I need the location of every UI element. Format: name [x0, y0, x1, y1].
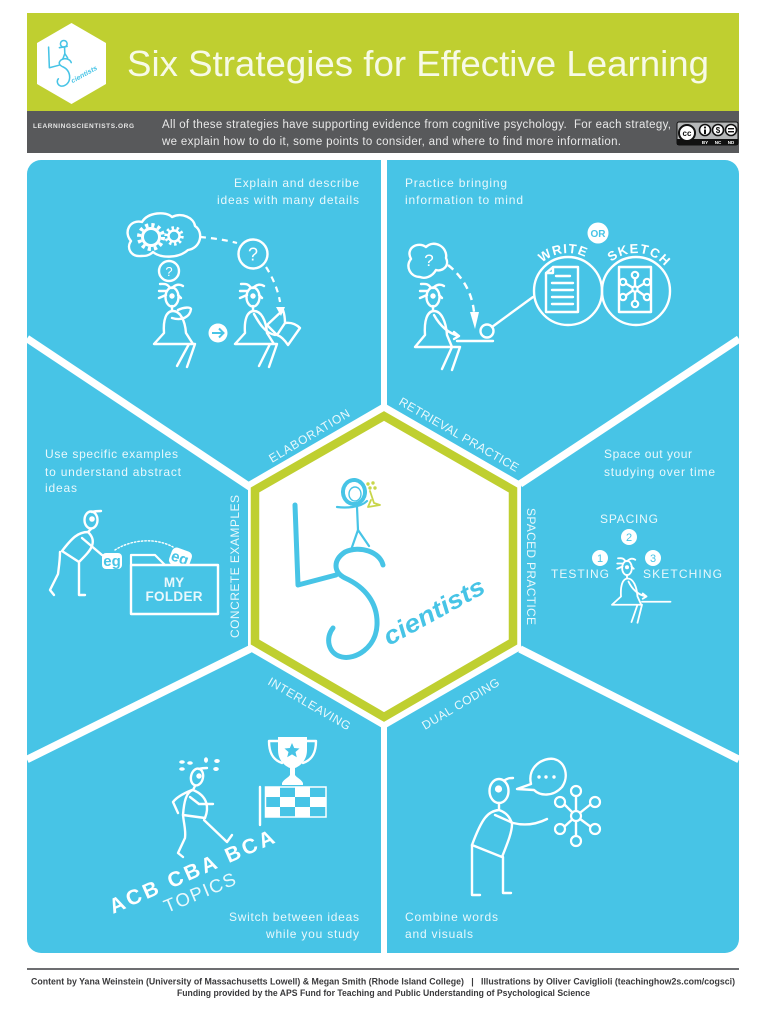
spaced practice text — [604, 447, 715, 479]
icon: rotated topics text: ACB CBA BCA — [106, 826, 278, 919]
arc text: write or sketch: OR — [590, 229, 606, 240]
creative commons badge — [677, 122, 738, 145]
icon: node network — [555, 786, 600, 846]
panel: concrete examples — [45, 447, 218, 614]
icon: my folder: FOLDER — [146, 589, 203, 604]
central hexagon logo — [248, 403, 521, 729]
panel: retrieval practice — [405, 176, 672, 372]
creative commons badge: ND — [728, 140, 735, 145]
label: retrieval practice: RETRIEVAL PRACTICE — [396, 394, 521, 475]
spacing label and numbered steps: 1 — [597, 553, 603, 565]
icon: dashed arrow — [448, 265, 479, 329]
retrieval text: information to mind — [405, 193, 523, 207]
label: spaced practice: SPACED PRACTICE — [524, 508, 538, 625]
icon: second example card: eg — [169, 547, 191, 569]
icon: seated person — [612, 558, 670, 623]
interleaving text — [229, 910, 359, 941]
icon: connector and circle — [480, 297, 533, 338]
icon: question thought cloud: ? — [424, 251, 434, 270]
icon: person at desk — [415, 284, 493, 370]
arc text: write or sketch: WRITE — [537, 244, 588, 262]
label: dual coding: DUAL CODING — [419, 675, 502, 733]
intro text: we explain how to do it, some points to consider, and where to find more information. — [161, 136, 621, 148]
icon: thinking person — [154, 284, 195, 367]
concrete examples text: Use specific examples — [45, 447, 178, 461]
header logo hexagon — [37, 23, 106, 104]
icon: leaning person — [50, 511, 102, 595]
label: concrete examples: CONCRETE EXAMPLES — [228, 495, 242, 638]
interleaving text: Switch between ideas — [229, 910, 359, 924]
icon: my folder: MY — [164, 575, 184, 590]
spacing label and numbered steps: 2 — [626, 532, 632, 544]
grey intro bar — [27, 111, 739, 153]
header banner — [27, 13, 739, 111]
intro text — [161, 119, 671, 148]
icon: standing person — [472, 778, 547, 895]
interleaving text: while you study — [265, 927, 359, 941]
icon: sketch circle — [602, 257, 670, 325]
spacing label and numbered steps: SKETCHING — [643, 567, 722, 581]
creative commons badge: NC — [715, 140, 722, 145]
icon: checkered flag — [260, 787, 326, 825]
icon: small question circle — [159, 261, 179, 281]
icon: arrow circle — [208, 324, 228, 342]
icon: write circle — [534, 257, 602, 325]
icon: dashed path with question — [200, 237, 285, 316]
creative commons badge: cc — [683, 129, 692, 138]
logo word: cientists — [378, 572, 490, 651]
spacing label and numbered steps: 3 — [650, 553, 656, 565]
dual coding text: and visuals — [405, 927, 473, 941]
arc text: write or sketch: SKETCH — [608, 244, 670, 266]
website: LEARNINGSCIENTISTS.ORG — [33, 123, 134, 130]
creative commons badge: BY — [702, 140, 708, 145]
icon: reading person — [235, 284, 277, 367]
header logo hexagon: cientists — [70, 65, 99, 85]
logo stick figure — [337, 480, 369, 550]
retrieval text: Practice bringing — [405, 176, 507, 190]
elaboration text: Explain and describe — [234, 176, 359, 190]
spacing label and numbered steps: SPACING — [600, 512, 658, 526]
blue panel background — [27, 160, 739, 953]
icon: trophy — [269, 737, 316, 785]
footer credits: Funding provided by the APS Fund for Teaching and Public Understanding of Psychological Science — [177, 988, 590, 998]
icon: speech bubble — [517, 759, 566, 795]
concrete examples text — [45, 447, 182, 495]
dual coding text: Combine words — [405, 910, 498, 924]
icon: rotated topics text: TOPICS — [160, 868, 239, 917]
icon: question thought cloud — [408, 244, 447, 278]
creative commons badge: $ — [716, 126, 721, 135]
icon: open book — [267, 310, 300, 345]
footer credits — [27, 968, 739, 998]
dual coding text — [405, 910, 498, 941]
panel: dual coding — [405, 759, 600, 941]
elaboration text — [217, 176, 359, 207]
title: Six Strategies for Effective Learning — [127, 43, 709, 84]
label: elaboration: ELABORATION — [266, 406, 352, 466]
concrete examples text: to understand abstract — [45, 465, 182, 479]
icon: example card: eg — [103, 553, 121, 570]
retrieval text — [405, 176, 523, 207]
spacing label and numbered steps: TESTING — [551, 567, 609, 581]
footer credits: Content by Yana Weinstein (University of Massachusetts Lowell) & Megan Smith (Rhode Island College) | Illustrations by Oliver Caviglioli (teachinghow2s.com/cogsci) — [31, 976, 735, 986]
icon: small question circle: ? — [165, 264, 173, 279]
icon: walking person with sweat drops — [173, 757, 232, 857]
strategy labels — [228, 394, 538, 733]
panel: interleaving — [106, 737, 359, 941]
intro text: All of these strategies have supporting evidence from cognitive psychology. For each strategy, — [162, 119, 671, 131]
spaced practice text: Space out your — [604, 447, 692, 461]
spacing label and numbered steps — [551, 512, 722, 581]
panel: spaced practice — [551, 447, 722, 623]
icon: thought cloud with gears — [128, 213, 200, 257]
icon: dotted arc — [115, 541, 173, 550]
logo letters L and S — [295, 505, 383, 657]
elaboration text: ideas with many details — [217, 193, 359, 207]
icon: dashed path with question: ? — [248, 244, 258, 264]
logo flask — [367, 482, 380, 507]
icon: my folder — [131, 555, 218, 614]
arc text: write or sketch — [537, 222, 670, 266]
label: interleaving: INTERLEAVING — [266, 674, 353, 733]
panel: elaboration — [128, 176, 359, 367]
concrete examples text: ideas — [45, 481, 77, 495]
spaced practice text: studying over time — [604, 465, 715, 479]
